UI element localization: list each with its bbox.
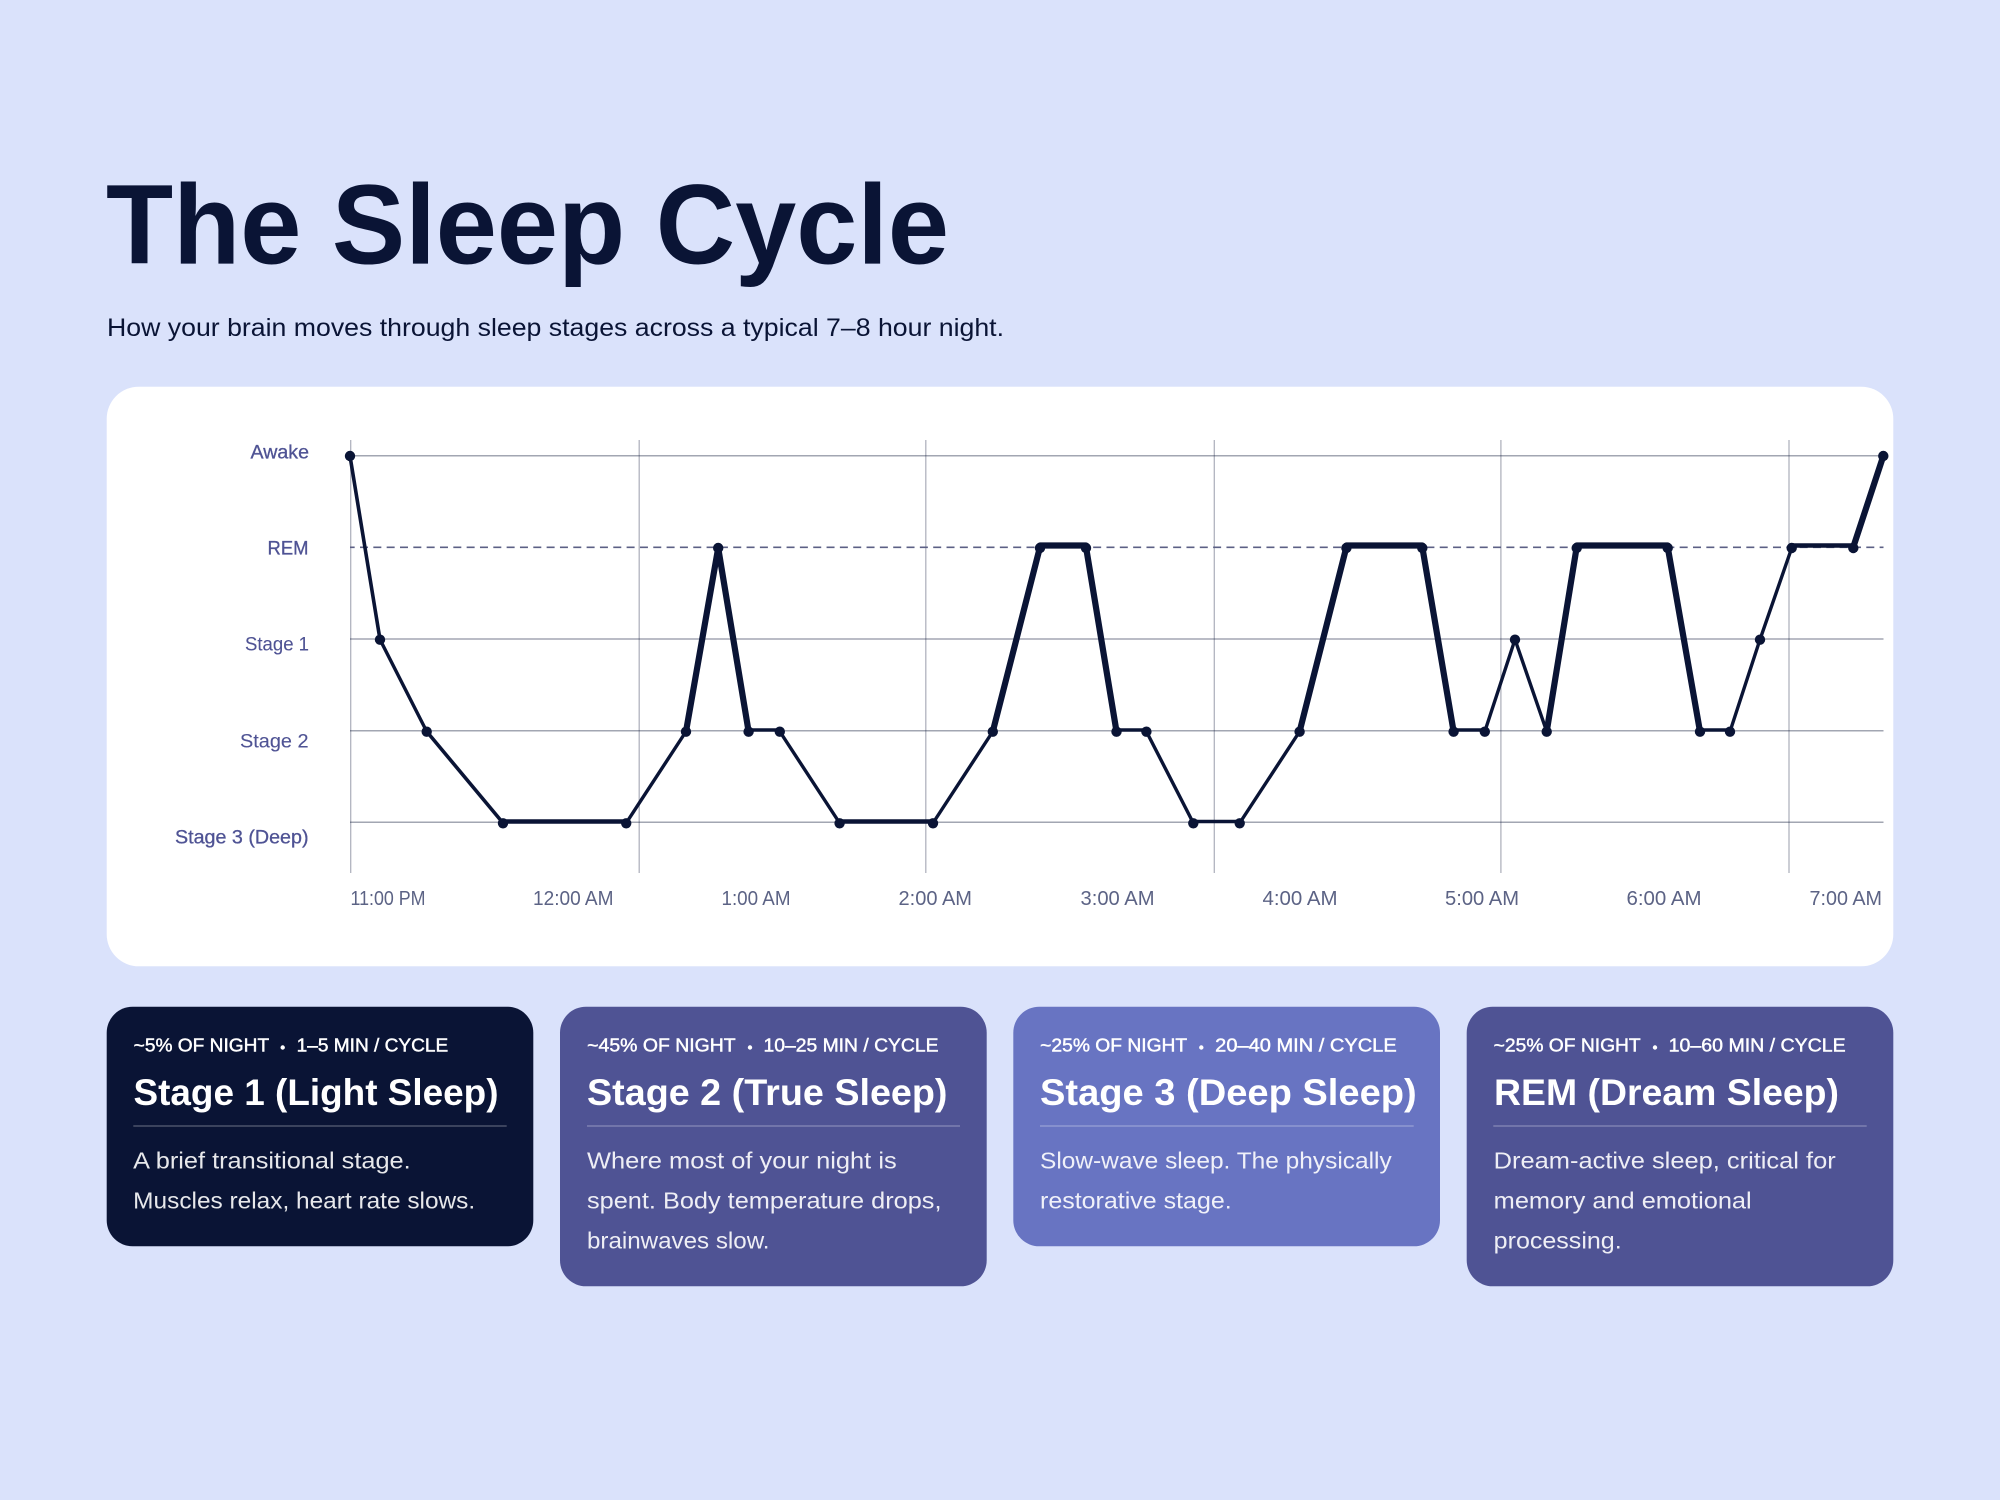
x axis time labels: 1:00 AM xyxy=(722,888,790,910)
REM description: Dream-active sleep, critical for xyxy=(1494,1147,1836,1173)
x axis time labels: 5:00 AM xyxy=(1445,888,1519,910)
REM heading: REM (Dream Sleep) xyxy=(1494,1071,1839,1113)
chart gridlines xyxy=(350,440,1884,873)
x axis time labels: 2:00 AM xyxy=(898,888,972,910)
stage 3 description: Slow-wave sleep. The physically xyxy=(1040,1147,1392,1173)
y axis labels: Stage 1 xyxy=(245,635,309,656)
REM description: processing. xyxy=(1494,1227,1622,1253)
card: stage 3 xyxy=(1013,1007,1440,1246)
stage 2 description: spent. Body temperature drops, xyxy=(587,1187,942,1213)
stage 3 description xyxy=(1040,1147,1392,1213)
x axis time labels: 3:00 AM xyxy=(1080,888,1154,910)
stage 3 heading: Stage 3 (Deep Sleep) xyxy=(1040,1071,1417,1113)
stage 1 stats: 1–5 MIN / CYCLE xyxy=(297,1035,448,1056)
REM stats: ~25% OF NIGHT xyxy=(1494,1035,1641,1056)
x axis time labels: 12:00 AM xyxy=(533,888,614,910)
x axis time labels: 7:00 AM xyxy=(1810,888,1882,910)
stage 2 stats: ~45% OF NIGHT xyxy=(587,1035,736,1056)
card: REM xyxy=(1467,1007,1893,1286)
stage 1 stats xyxy=(134,1035,448,1056)
x axis time labels xyxy=(350,888,1882,910)
subtitle: How your brain moves through sleep stages across a typical 7–8 hour night. xyxy=(107,314,1004,342)
x axis time labels: 4:00 AM xyxy=(1262,888,1338,910)
hypnogram line xyxy=(350,456,1883,823)
stage 1 description: A brief transitional stage. xyxy=(133,1147,411,1173)
y axis labels: Stage 3 (Deep) xyxy=(175,827,308,848)
stage 2 heading: Stage 2 (True Sleep) xyxy=(587,1071,948,1113)
y axis labels: REM xyxy=(268,538,308,559)
panel: sleep stage chart xyxy=(107,387,1893,966)
REM description xyxy=(1494,1147,1836,1253)
card: stage 1 xyxy=(107,1007,533,1246)
stage 1 stats: ~5% OF NIGHT xyxy=(134,1035,269,1056)
stage 1 heading: Stage 1 (Light Sleep) xyxy=(134,1071,498,1113)
stage 2 stats xyxy=(587,1035,938,1056)
stage 3 description: restorative stage. xyxy=(1040,1187,1232,1213)
y axis labels: Awake xyxy=(250,442,309,463)
REM stats xyxy=(1494,1035,1846,1056)
stage 1 description: Muscles relax, heart rate slows. xyxy=(133,1187,475,1213)
stage 3 stats: 20–40 MIN / CYCLE xyxy=(1215,1035,1397,1056)
x axis time labels: 6:00 AM xyxy=(1626,888,1702,910)
hypnogram data points xyxy=(345,451,1889,828)
x axis time labels: 11:00 PM xyxy=(350,888,426,910)
title: The Sleep Cycle xyxy=(106,162,949,288)
stage 2 description: brainwaves slow. xyxy=(587,1227,770,1253)
stage 3 stats: ~25% OF NIGHT xyxy=(1040,1035,1187,1056)
y axis labels: Stage 2 xyxy=(240,731,308,752)
stage 2 description: Where most of your night is xyxy=(587,1147,897,1173)
stage 1 description xyxy=(133,1147,475,1213)
stage 2 description xyxy=(587,1147,942,1253)
REM stats: 10–60 MIN / CYCLE xyxy=(1669,1035,1846,1056)
card: stage 2 xyxy=(560,1007,987,1286)
stage 3 stats xyxy=(1040,1035,1397,1056)
y axis labels xyxy=(175,442,309,848)
stage 2 stats: 10–25 MIN / CYCLE xyxy=(764,1035,938,1056)
REM description: memory and emotional xyxy=(1494,1187,1752,1213)
